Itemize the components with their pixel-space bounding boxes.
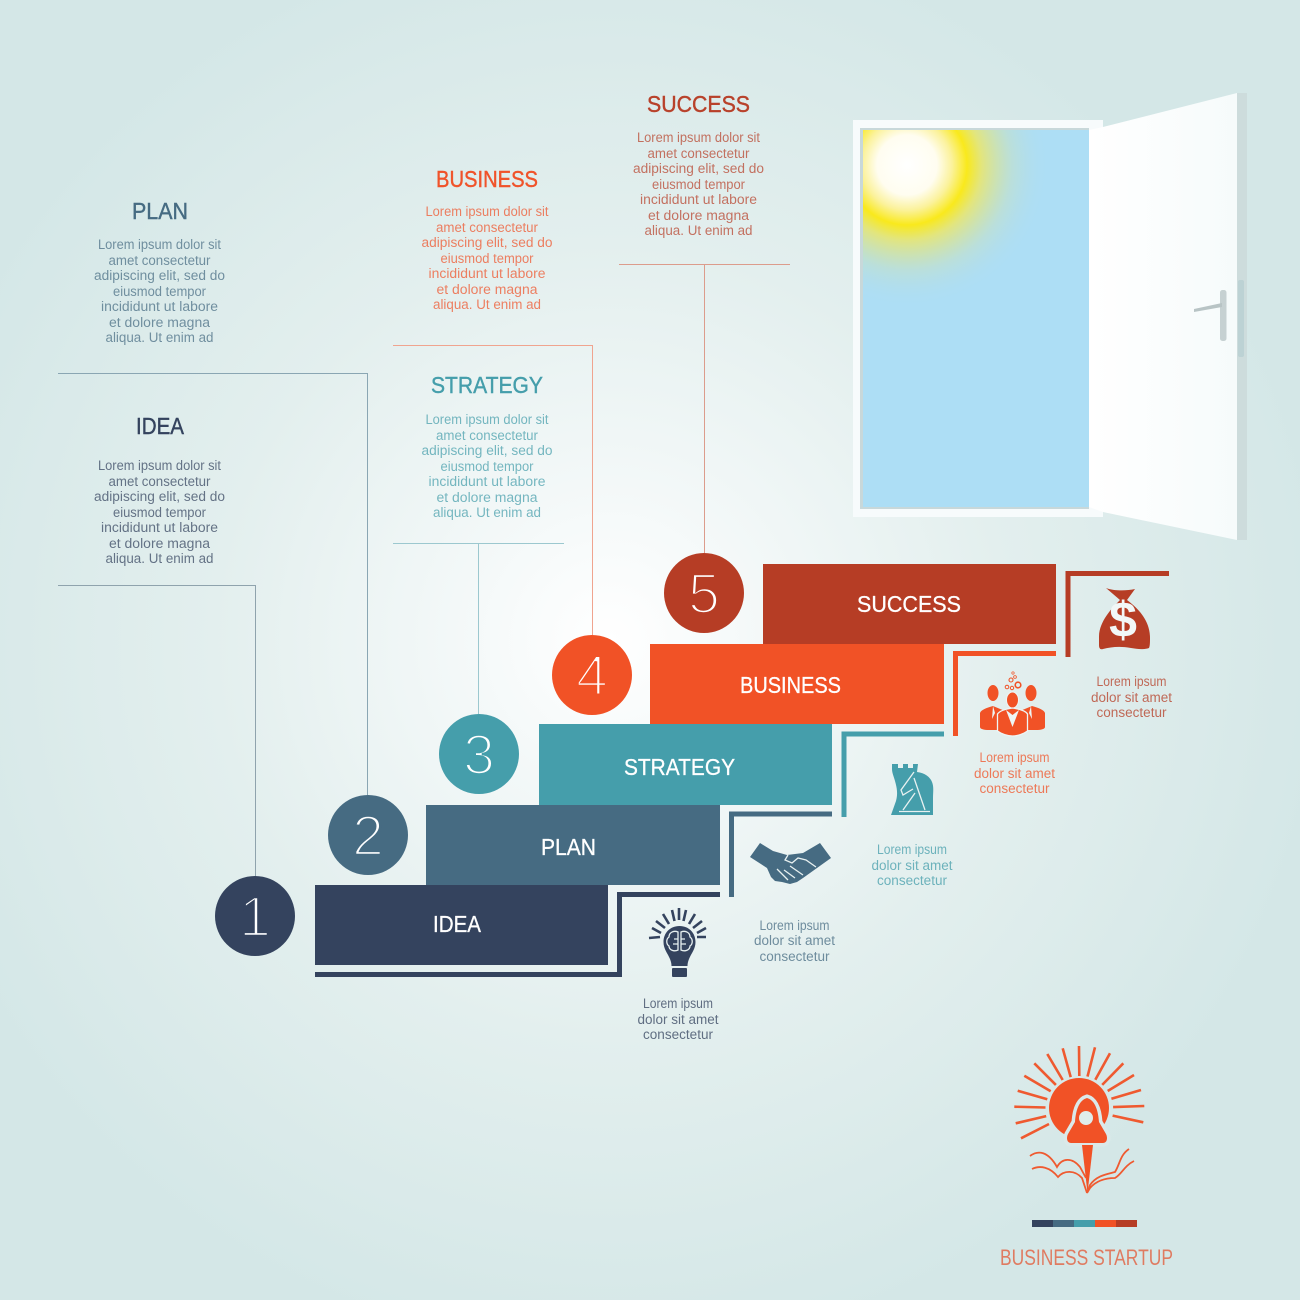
bar: business — [650, 644, 944, 724]
step 2: plan — [328, 795, 832, 897]
number circle 3 — [439, 714, 519, 794]
text block: idea: adipiscing elit, sed do — [94, 489, 225, 504]
number circle 2 — [328, 795, 408, 875]
bar: strategy — [539, 724, 832, 805]
text block: idea: eiusmod tempor — [113, 505, 206, 520]
number circle 4: 4 — [576, 644, 608, 708]
text block: business: adipiscing elit, sed do — [422, 235, 552, 250]
caption: idea icon: dolor sit amet — [638, 1012, 719, 1027]
text block: strategy: Lorem ipsum dolor sit — [426, 412, 549, 427]
text block: strategy: aliqua. Ut enim ad — [433, 505, 541, 520]
text block: business: incididunt ut labore — [428, 266, 546, 281]
caption: strategy icon: consectetur — [877, 873, 947, 888]
caption: success icon — [1091, 674, 1172, 720]
text block: idea: Lorem ipsum dolor sit — [98, 458, 221, 473]
text block: plan: adipiscing elit, sed do — [94, 268, 225, 283]
door edge — [1237, 93, 1247, 540]
caption: business icon: consectetur — [980, 781, 1050, 796]
bar: business: BUSINESS — [740, 672, 841, 698]
door handle — [1194, 290, 1226, 341]
number circle 1: 1 — [239, 885, 271, 949]
door lock plate — [1238, 280, 1244, 357]
text block: idea: IDEA — [136, 413, 185, 439]
caption: idea icon — [638, 996, 719, 1042]
stair outline: plan — [732, 814, 832, 897]
text block: success: adipiscing elit, sed do — [633, 161, 764, 176]
text block: plan: aliqua. Ut enim ad — [106, 330, 214, 345]
text block: plan: et dolore magna — [109, 315, 210, 330]
stair outline: business — [956, 654, 1056, 736]
text block: strategy: adipiscing elit, sed do — [422, 443, 552, 458]
text block: success: SUCCESS — [647, 91, 750, 117]
text block: strategy: incididunt ut labore — [428, 474, 546, 489]
text block: strategy: amet consectetur — [436, 428, 538, 443]
caption: plan icon: dolor sit amet — [754, 933, 835, 948]
icon: light bulb with brain — [649, 908, 706, 977]
rocket — [1067, 1098, 1107, 1193]
text block: plan: eiusmod tempor — [113, 284, 206, 299]
number circle 5 — [664, 553, 744, 633]
caption: success icon: consectetur — [1096, 705, 1167, 720]
text block: plan: incididunt ut labore — [101, 299, 218, 314]
bar: success: SUCCESS — [857, 591, 961, 617]
sun rays — [1014, 1046, 1144, 1138]
bar: success — [763, 564, 1056, 644]
number circle 5: 5 — [688, 562, 720, 626]
stair outline: strategy — [844, 734, 944, 817]
text block: success: et dolore magna — [648, 208, 749, 223]
caption: success icon: Lorem ipsum — [1096, 674, 1166, 689]
icon: money bag — [1099, 588, 1150, 649]
text block: strategy: et dolore magna — [436, 490, 538, 505]
caption: idea icon: Lorem ipsum — [643, 996, 713, 1011]
text block: idea: amet consectetur — [108, 474, 211, 489]
sun disc — [1049, 1078, 1109, 1138]
caption: idea icon: consectetur — [643, 1027, 713, 1042]
text block: plan: amet consectetur — [108, 253, 211, 268]
text block: strategy: STRATEGY — [431, 372, 543, 398]
text block: idea: aliqua. Ut enim ad — [106, 551, 214, 566]
door leaf — [1089, 93, 1237, 540]
text block: plan: Lorem ipsum dolor sit — [98, 237, 221, 252]
bar: idea: IDEA — [433, 911, 482, 937]
number circle 4 — [552, 635, 632, 715]
text block: business: amet consectetur — [436, 220, 538, 235]
text block: business: Lorem ipsum dolor sit — [426, 204, 549, 219]
icon: business team with gears — [980, 672, 1045, 736]
caption: strategy icon: Lorem ipsum — [877, 842, 947, 857]
caption: business icon: dolor sit amet — [974, 766, 1055, 781]
text block: plan: PLAN — [132, 198, 188, 224]
bar: plan: PLAN — [541, 834, 596, 860]
icon: handshake — [750, 843, 831, 884]
wings of book — [1030, 1149, 1134, 1193]
step 3: strategy — [439, 714, 944, 817]
sky seen through doorway — [860, 128, 1089, 509]
text block: business: BUSINESS — [436, 166, 538, 192]
icon: chess rook and knight — [891, 764, 933, 815]
text block: idea — [94, 413, 225, 566]
logo caption: BUSINESS STARTUP — [1000, 1245, 1173, 1270]
text block: plan — [94, 198, 225, 345]
text block: strategy: eiusmod tempor — [440, 459, 534, 474]
number circle 3: 3 — [463, 723, 495, 787]
bar: idea — [315, 885, 608, 965]
text block: success — [633, 91, 764, 238]
text block: business: et dolore magna — [436, 282, 538, 297]
text block: business — [422, 166, 552, 312]
bar: strategy: STRATEGY — [624, 754, 735, 780]
text block: business: eiusmod tempor — [440, 251, 534, 266]
open door — [853, 93, 1247, 540]
caption: strategy icon — [872, 842, 953, 888]
caption: plan icon: consectetur — [760, 949, 830, 964]
door frame — [853, 120, 1103, 517]
text block: idea: et dolore magna — [109, 536, 210, 551]
logo colour bar — [1032, 1220, 1137, 1227]
stair outline: success — [1068, 574, 1169, 657]
caption: plan icon — [754, 918, 835, 964]
text block: idea: incididunt ut labore — [101, 520, 218, 535]
bar: plan — [426, 805, 720, 885]
text block: success: incididunt ut labore — [640, 192, 757, 207]
stair outline: idea — [315, 894, 720, 974]
caption: plan icon: Lorem ipsum — [760, 918, 830, 933]
text block: success: Lorem ipsum dolor sit — [637, 130, 760, 145]
logo: rocket and sun — [1014, 1046, 1144, 1193]
step 1: idea — [215, 876, 720, 974]
step 4: business — [552, 635, 1056, 736]
number circle 2: 2 — [352, 804, 384, 868]
text block: success: aliqua. Ut enim ad — [644, 223, 752, 238]
text block: business: aliqua. Ut enim ad — [433, 297, 541, 312]
number circle 1 — [215, 876, 295, 956]
text block: success: eiusmod tempor — [652, 177, 745, 192]
text block: strategy — [422, 372, 552, 520]
step 5: success — [664, 553, 1169, 657]
caption: business icon: Lorem ipsum — [980, 750, 1050, 765]
connector lines — [58, 264, 790, 876]
sun — [863, 130, 1029, 287]
text block: success: amet consectetur — [648, 146, 750, 161]
caption: strategy icon: dolor sit amet — [872, 858, 953, 873]
caption: success icon: dolor sit amet — [1091, 690, 1172, 705]
icon: money bag: $ — [1109, 592, 1137, 648]
caption: business icon — [974, 750, 1055, 796]
